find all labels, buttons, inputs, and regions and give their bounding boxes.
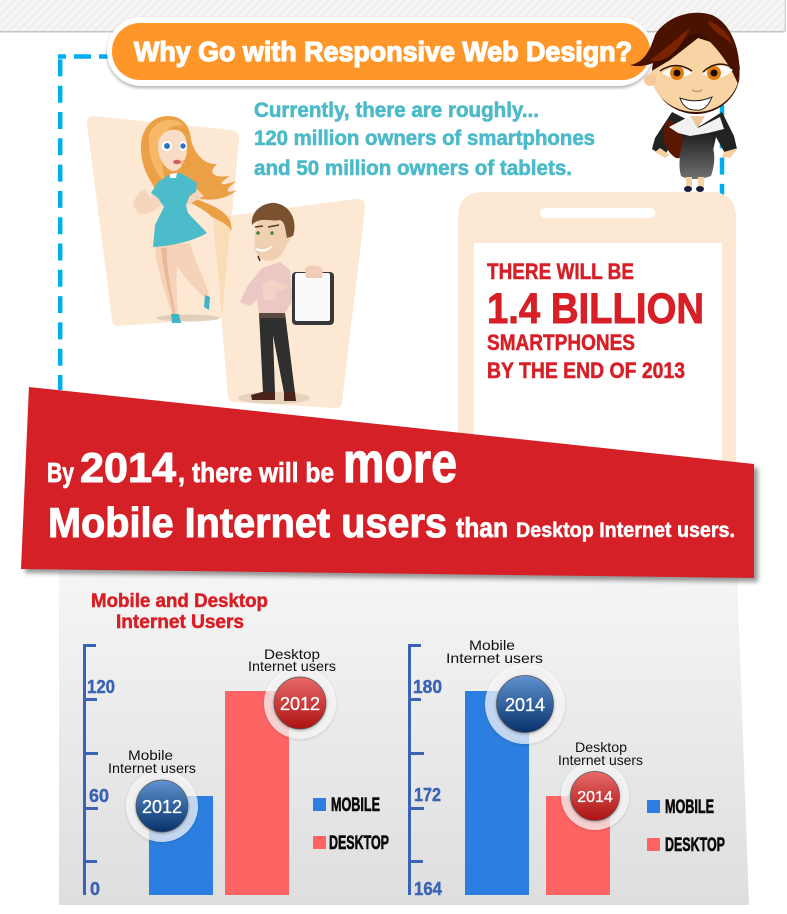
label: desktop 2012: Desktop [264, 646, 320, 662]
chart: 2014 [408, 637, 725, 899]
label: mobile 2012 [108, 747, 196, 776]
label: mobile 2014: Internet users [446, 650, 543, 666]
icon: man holding tablet [238, 203, 334, 404]
label: desktop 2014: Desktop [575, 739, 627, 755]
chart: 2012 [83, 644, 389, 899]
label: mobile 2012: Internet users [108, 760, 196, 776]
panel: chart background [59, 572, 749, 905]
title: Why Go with Responsive Web Design? [134, 36, 632, 67]
label: desktop 2014 [558, 739, 643, 768]
axis: 164 [414, 879, 442, 899]
axis: 172 [414, 785, 441, 805]
bar: desktop 2012 [225, 691, 289, 895]
phone statistic text: 1.4 BILLION [487, 285, 704, 333]
bar: mobile 2014 [465, 691, 529, 895]
axis: 60 [89, 786, 109, 806]
badge: mobile 2012 [126, 770, 198, 843]
intro text [254, 99, 595, 180]
banner text: 2014 [80, 444, 177, 491]
label: mobile 2012: Mobile [128, 747, 173, 763]
legend: DESKTOP [665, 835, 725, 856]
bar: mobile 2012 [149, 796, 213, 895]
banner text: Desktop Internet users. [516, 519, 735, 542]
phone frame [458, 192, 736, 470]
icon: businesswoman presenter [630, 13, 740, 192]
panel overlap [213, 216, 231, 318]
banner text: there will be [192, 457, 334, 488]
axis [83, 644, 115, 899]
bar: desktop 2014 [546, 796, 610, 895]
phone statistic text: BY THE END OF 2013 [487, 358, 685, 383]
banner text: By [47, 457, 74, 488]
badge: desktop 2014: 2014 [577, 789, 613, 806]
chart heading [91, 591, 268, 633]
badge: mobile 2014: 2014 [505, 695, 545, 715]
axis [408, 644, 442, 899]
axis: 0 [90, 879, 100, 899]
phone statistic text: SMARTPHONES [487, 330, 635, 355]
legend: DESKTOP [329, 833, 389, 854]
chart heading: Internet Users [116, 612, 244, 633]
label: desktop 2012 [248, 646, 336, 674]
axis: 120 [87, 677, 115, 697]
panel: woman backdrop [87, 116, 239, 326]
banner text: than [456, 512, 508, 543]
legend: MOBILE [665, 797, 714, 818]
chart heading: Mobile and Desktop [91, 591, 268, 612]
label: desktop 2014: Internet users [558, 752, 643, 768]
intro text: and 50 million owners of tablets. [254, 157, 572, 180]
banner text [47, 431, 735, 546]
banner text: more [343, 431, 457, 495]
badge: desktop 2014 [561, 762, 629, 831]
banner text: Mobile Internet users [48, 499, 447, 546]
panel: man backdrop [213, 199, 365, 408]
legend [647, 797, 725, 856]
label: mobile 2014 [446, 637, 543, 666]
dashed connector line [58, 54, 722, 390]
badge: mobile 2012: 2012 [142, 797, 182, 817]
label: desktop 2012: Internet users [248, 658, 336, 674]
intro text: Currently, there are roughly... [254, 99, 539, 122]
badge: desktop 2012 [264, 667, 336, 740]
banner text: , [178, 457, 185, 488]
intro text: 120 million owners of smartphones [254, 127, 595, 150]
phone statistic text [487, 259, 704, 383]
label: mobile 2014: Mobile [469, 637, 515, 653]
top striped band [0, 0, 786, 32]
badge: mobile 2014 [485, 664, 565, 745]
legend [313, 795, 389, 854]
phone statistic text: THERE WILL BE [487, 259, 634, 284]
badge: desktop 2012: 2012 [280, 694, 320, 714]
axis: 180 [413, 677, 442, 697]
legend: MOBILE [331, 795, 380, 816]
red banner [21, 387, 758, 582]
banner: title pill [107, 17, 653, 88]
icon: woman in blue dress [133, 116, 237, 323]
